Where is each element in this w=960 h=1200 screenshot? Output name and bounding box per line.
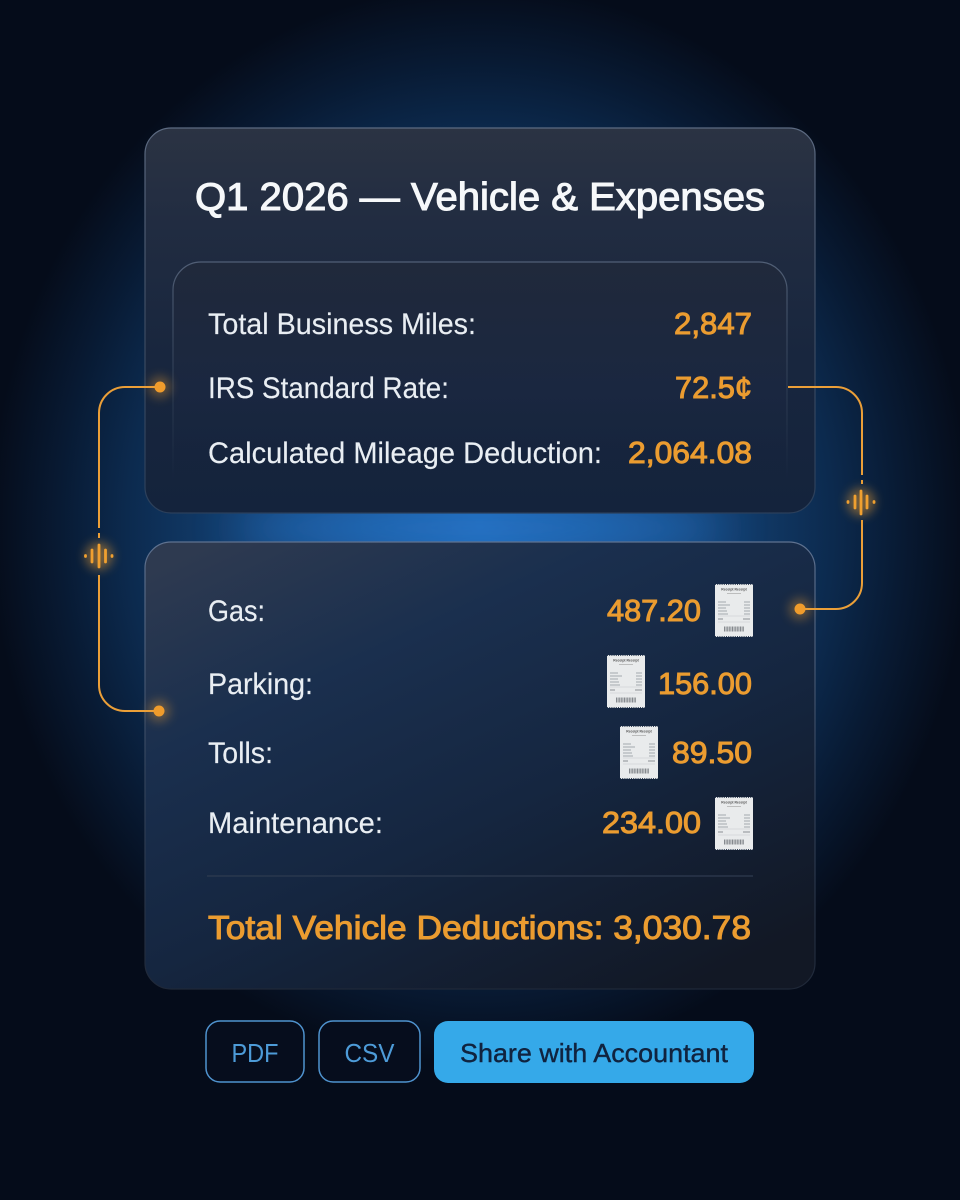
row: parking (208, 655, 752, 708)
row: IRS standard rate: IRS Standard Rate: (208, 372, 449, 405)
row: gas (208, 584, 753, 637)
row: parking: Parking: (208, 668, 313, 701)
row: total business miles (208, 306, 752, 341)
row: IRS standard rate: 72.5¢ (675, 370, 752, 405)
button: share with accountant: Share with Accountant (460, 1038, 729, 1068)
button: share with accountant (434, 1021, 754, 1083)
row: calculated mileage deduction: Calculated Mileage Deduction: (208, 437, 602, 470)
row: parking: 156.00 (658, 666, 752, 701)
row: maintenance: 234.00 (602, 805, 701, 840)
icon: left signal (85, 542, 113, 570)
row: gas: Gas: (208, 595, 265, 628)
row: maintenance (208, 797, 753, 850)
row: maintenance: Maintenance: (208, 807, 383, 840)
icon: tolls receipt (620, 726, 658, 779)
row: tolls: 89.50 (672, 735, 752, 770)
row: total business miles: 2,847 (674, 306, 752, 341)
arrow: right connector (788, 387, 875, 620)
button: CSV (319, 1021, 420, 1082)
button: PDF: PDF (232, 1038, 278, 1068)
row: tolls (208, 726, 752, 779)
icon: parking receipt (607, 655, 645, 708)
row: IRS standard rate (208, 370, 752, 405)
button: PDF (206, 1021, 304, 1082)
panel: expenses card (145, 542, 815, 989)
total vehicle deductions: Total Vehicle Deductions: 3,030.78 (208, 909, 751, 946)
row: calculated mileage deduction: 2,064.08 (628, 435, 752, 470)
panel: mileage card (145, 128, 815, 513)
row: total business miles: Total Business Miles: (208, 308, 476, 341)
button: CSV: CSV (344, 1038, 395, 1068)
panel: mileage figures (173, 262, 787, 480)
icon: right signal (847, 488, 875, 516)
arrow: left connector (85, 376, 171, 722)
row: tolls: Tolls: (208, 737, 273, 770)
row: gas: 487.20 (607, 593, 701, 628)
icon: gas receipt (715, 584, 753, 637)
title: Q1 2026 — Vehicle & Expenses (195, 176, 765, 219)
icon: maintenance receipt (715, 797, 753, 850)
